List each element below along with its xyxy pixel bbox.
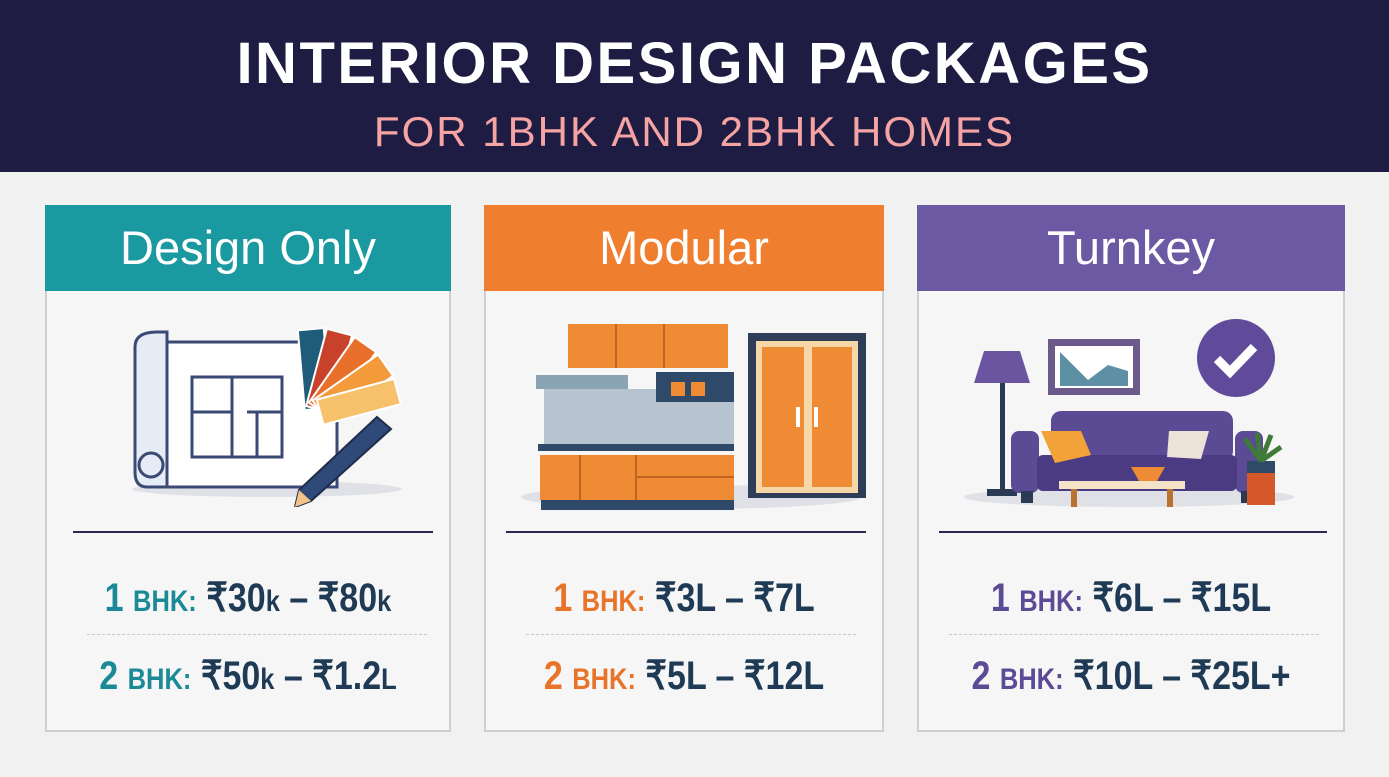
price 2bhk: 2 BHK: ₹50k – ₹1.2L [99, 654, 397, 698]
header banner [0, 0, 1389, 172]
icon: modular kitchen and wardrobe [521, 324, 866, 510]
icon: living room with check [964, 319, 1294, 507]
panel heading: Turnkey [1047, 221, 1215, 274]
price 2bhk: 2 BHK: ₹10L – ₹25L+ [971, 654, 1291, 698]
title: INTERIOR DESIGN PACKAGES [236, 31, 1153, 96]
panel: turnkey [917, 205, 1345, 732]
price 2bhk: 2 BHK: ₹5L – ₹12L [544, 654, 824, 698]
panel heading: Modular [599, 221, 769, 274]
panel heading [45, 205, 451, 291]
price 1bhk: 1 BHK: ₹6L – ₹15L [991, 576, 1271, 620]
panel heading: Design Only [120, 221, 376, 274]
panel: modular [484, 205, 884, 732]
subtitle: FOR 1BHK AND 2BHK HOMES [374, 108, 1015, 155]
panel: design only [45, 205, 451, 732]
icon: blueprint with swatches and pencil [132, 327, 402, 507]
panel heading [917, 205, 1345, 291]
panel heading [484, 205, 884, 291]
price 1bhk: 1 BHK: ₹3L – ₹7L [553, 576, 815, 620]
price 1bhk: 1 BHK: ₹30k – ₹80k [105, 576, 391, 620]
